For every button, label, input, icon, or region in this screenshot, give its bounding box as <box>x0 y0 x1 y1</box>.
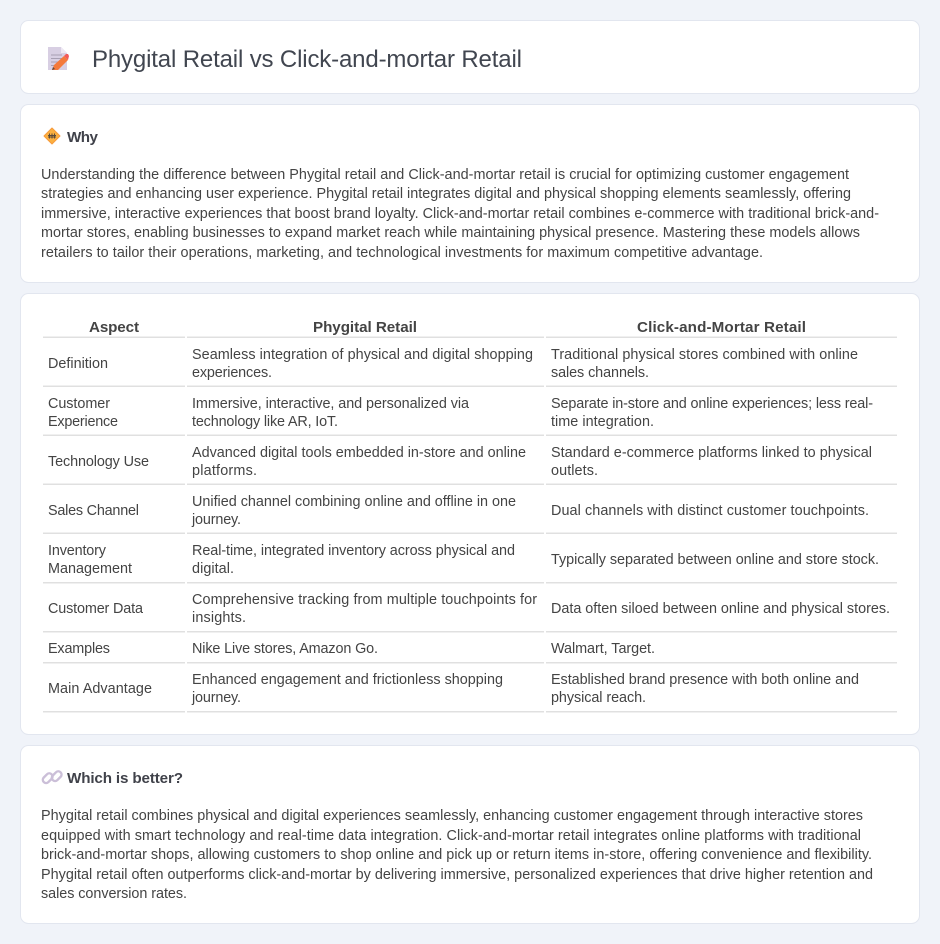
row: customer experience: Immersive, interactive, and personalized via <box>192 396 469 412</box>
table header: Click-and-Mortar Retail <box>637 319 806 336</box>
heading: page title: Phygital Retail vs Click-and-mortar Retail <box>92 46 522 73</box>
row: customer data: insights. <box>192 610 246 626</box>
text block: why paragraph: retailers to tailor their operations, marketing, and technological investments for maximum competitive advantage. <box>41 245 763 261</box>
row: technology use: Technology Use <box>48 454 149 470</box>
text block: which is better paragraph: brick-and-mortar shops, allowing customers to shop online and pick up or return items in-store, offering convenience and flexibility. <box>41 847 872 863</box>
heading: which is better: Which is better? <box>67 770 183 787</box>
row: customer experience: Separate in-store and online experiences; less real- <box>551 396 873 412</box>
row: examples: Walmart, Target. <box>551 641 655 657</box>
row: inventory management: Real-time, integrated inventory across physical and <box>192 543 515 559</box>
row: inventory management: digital. <box>192 561 234 577</box>
icon: orange diamond <box>44 128 60 144</box>
table header: Phygital Retail <box>313 319 417 336</box>
text block: why paragraph: strategies and enhancing user experience. Phygital retail integrates digital and physical shopping elements seamlessly, offering <box>41 186 851 202</box>
row: customer experience: time integration. <box>551 414 654 430</box>
row: sales channel: Sales Channel <box>48 503 139 519</box>
row: sales channel: Unified channel combining online and offline in one <box>192 494 516 510</box>
panel: title <box>20 20 920 94</box>
table header <box>43 319 897 338</box>
panel: which is better <box>20 746 920 924</box>
row: customer data: Comprehensive tracking from multiple touchpoints for <box>192 592 537 608</box>
row: definition: Seamless integration of physical and digital shopping <box>192 347 533 363</box>
row: technology use: Advanced digital tools embedded in-store and online <box>192 445 526 461</box>
table header: Aspect <box>89 319 139 336</box>
row: definition: Definition <box>48 356 108 372</box>
row: main advantage: Enhanced engagement and frictionless shopping <box>192 672 503 688</box>
row: examples <box>43 641 897 664</box>
row: technology use: Standard e-commerce platforms linked to physical <box>551 445 872 461</box>
row: main advantage <box>43 672 897 712</box>
row: main advantage: journey. <box>191 690 241 706</box>
row: sales channel <box>43 494 897 534</box>
row: examples: Nike Live stores, Amazon Go. <box>192 641 378 657</box>
icon: chain link <box>41 770 63 784</box>
row: main advantage: physical reach. <box>551 690 646 706</box>
row: definition <box>43 347 897 387</box>
row: definition: sales channels. <box>551 365 649 381</box>
heading: why: Why <box>67 129 99 146</box>
row: examples: Examples <box>48 641 110 657</box>
row: main advantage: Established brand presence with both online and <box>551 672 859 688</box>
panel: comparison table <box>20 294 920 734</box>
row: inventory management: Inventory <box>48 543 107 559</box>
text block: which is better paragraph: Phygital retail combines physical and digital experiences seamlessly, enhancing customer engagement through interactive stores <box>41 808 863 824</box>
text block: why paragraph <box>41 167 879 261</box>
row: inventory management: Management <box>48 561 132 577</box>
row: inventory management <box>43 543 897 584</box>
row: sales channel: journey. <box>191 512 241 528</box>
icon: document with pencil <box>48 47 69 70</box>
row: definition: experiences. <box>192 365 272 381</box>
row: customer data <box>43 592 897 632</box>
row: definition: Traditional physical stores combined with online <box>551 347 858 363</box>
row: inventory management: Typically separated between online and store stock. <box>551 552 879 568</box>
text block: which is better paragraph <box>41 808 873 902</box>
row: sales channel: Dual channels with distinct customer touchpoints. <box>551 503 869 519</box>
row: customer experience <box>43 396 897 436</box>
row: customer experience: Experience <box>48 414 118 430</box>
row: technology use <box>43 445 897 485</box>
row: technology use: outlets. <box>551 463 598 479</box>
row: customer experience: Customer <box>48 396 110 412</box>
row: customer data: Customer Data <box>48 601 143 617</box>
row: customer data: Data often siloed between online and physical stores. <box>551 601 890 617</box>
row: customer experience: technology like AR, IoT. <box>192 414 338 430</box>
text block: why paragraph: mortar stores, enabling businesses to expand market reach while maintaining physical presence. Mastering these models allows <box>41 225 860 241</box>
panel: why <box>20 104 920 282</box>
text block: why paragraph: immersive, interactive experiences that boost brand loyalty. Click-and-mortar retail combines e-commerce with traditional brick-and- <box>41 206 879 222</box>
row: technology use: platforms. <box>192 463 257 479</box>
text block: which is better paragraph: equipped with smart technology and real-time data integration. Click-and-mortar retail integrates online platforms with traditional <box>41 828 861 844</box>
text block: which is better paragraph: Phygital retail often outperforms click-and-mortar by delivering immersive, personalized experiences that drive higher retention and <box>41 867 873 883</box>
row: main advantage: Main Advantage <box>48 681 152 697</box>
text block: which is better paragraph: sales conversion rates. <box>41 886 187 902</box>
text block: why paragraph: Understanding the difference between Phygital retail and Click-and-mortar retail is crucial for optimizing customer engagement <box>41 167 849 183</box>
